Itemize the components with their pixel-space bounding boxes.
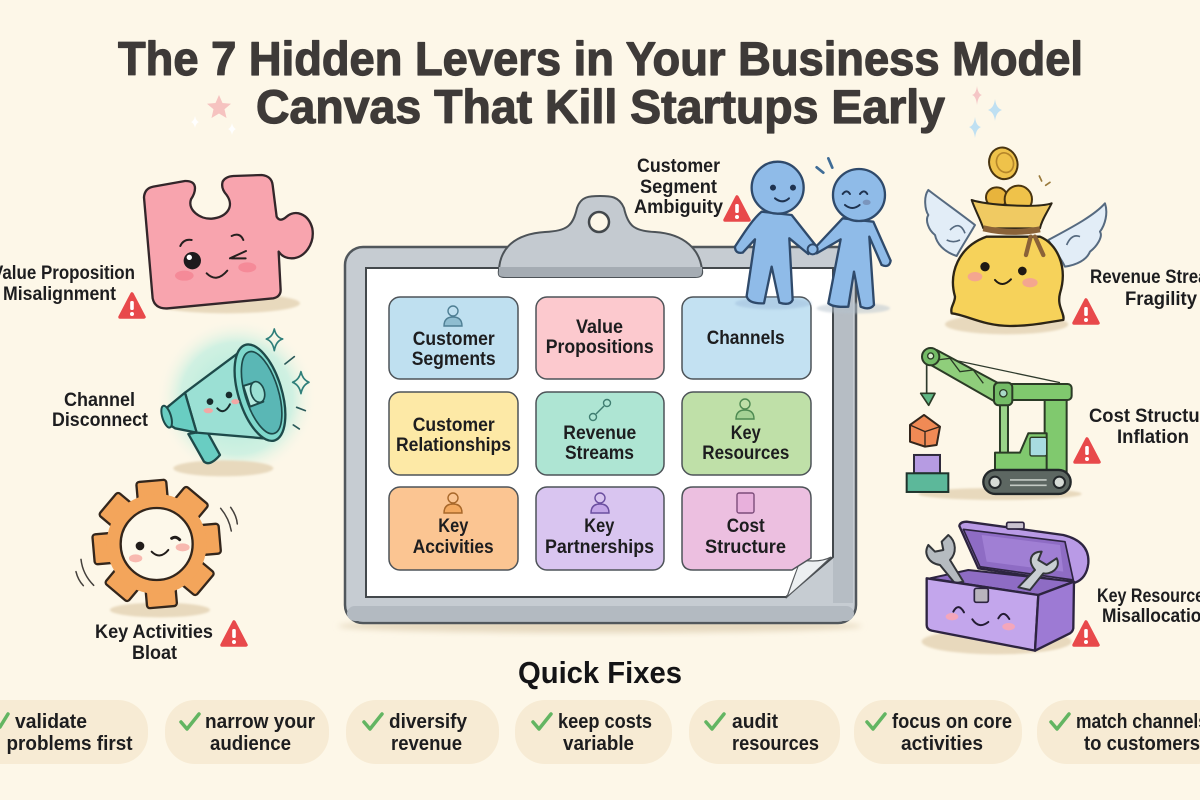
title: The 7 Hidden Levers in Your Business Model (118, 32, 1083, 85)
fix pill: focus on core activities (854, 700, 1022, 764)
label: Revenue Streams Fragility (1090, 267, 1200, 310)
canvas block: Key Resources: Resources (702, 443, 789, 464)
illustration: megaphone (157, 318, 317, 478)
canvas block: Customer Segments: Customer (413, 329, 495, 350)
label: Key Activities Bloat: Key Activities (95, 622, 213, 643)
fix pill: audit resources (689, 700, 840, 764)
canvas block: Value Propositions: Value (576, 317, 623, 338)
canvas block: Cost Structure: Structure (705, 537, 786, 558)
character: customer segment people (735, 158, 891, 314)
fix pill: diversify revenue: revenue (391, 733, 462, 755)
canvas block: Key Partnerships: Key (584, 516, 615, 537)
label: Customer Segment Ambiguity (634, 156, 723, 218)
canvas block: Value Propositions (536, 297, 664, 379)
title: Canvas That Kill Startups Early (256, 80, 945, 133)
fix pill: keep costs variable: keep costs (558, 711, 652, 733)
fix pill: keep costs variable (515, 700, 672, 764)
label: Customer Segment Ambiguity: Customer (637, 156, 721, 177)
label: Value Proposition Misalignment (0, 263, 135, 305)
canvas block: Key Partnerships: Partnerships (545, 537, 654, 558)
fix pill: match channels to customers (1037, 700, 1200, 764)
canvas block: Key Resources (682, 392, 811, 475)
illustration: money bag with wings (925, 144, 1106, 334)
label: Revenue Streams Fragility: Fragility (1125, 289, 1197, 310)
canvas block: Customer Relationships: Customer (413, 415, 495, 436)
fix pill: narrow your audience: narrow your (205, 711, 315, 733)
icon: warning customer segment (725, 197, 749, 220)
clipboard clip (499, 196, 702, 277)
canvas block: Key Activities (389, 487, 518, 570)
fix pill: diversify revenue: diversify (389, 711, 468, 733)
label: Key Resources Misallocation (1097, 586, 1200, 627)
fix pill: validate problems first (0, 700, 148, 764)
canvas block: Channels: Channels (707, 328, 785, 349)
canvas block: Customer Segments: Segments (412, 349, 496, 370)
icon: title sparkles (191, 86, 1002, 138)
page curl (787, 557, 831, 597)
canvas block: Revenue Streams (536, 392, 664, 475)
illustration: crane (907, 348, 1082, 500)
panel: clipboard (338, 196, 862, 633)
clipboard paper (366, 268, 833, 597)
canvas block: Key Resources: Key (731, 423, 761, 444)
fix pill: audit resources: audit (732, 711, 778, 733)
illustration: toolbox (922, 522, 1088, 654)
canvas block: Revenue Streams: Streams (565, 443, 634, 464)
label: Channel Disconnect (52, 390, 149, 431)
label: Channel Disconnect: Disconnect (52, 410, 149, 431)
canvas block: Customer Relationships: Relationships (396, 435, 511, 456)
fix pill: keep costs variable: variable (563, 733, 634, 755)
fix pill: validate problems first: validate (15, 711, 87, 733)
label: Key Activities Bloat: Bloat (132, 643, 178, 664)
canvas block: Revenue Streams: Revenue (563, 423, 636, 444)
canvas block: Customer Relationships (389, 392, 518, 475)
canvas block: Cost Structure (682, 487, 811, 570)
label: Cost Structure Inflation: Inflation (1117, 427, 1189, 448)
label: Customer Segment Ambiguity: Ambiguity (634, 197, 723, 218)
fix pill: focus on core activities: focus on core (892, 711, 1012, 733)
canvas block: Channels (682, 297, 811, 379)
fix pill: validate problems first: problems first (6, 733, 133, 755)
canvas block: Key Activities: Key (438, 516, 469, 537)
fix pill: focus on core activities: activities (901, 733, 983, 755)
heading: Quick Fixes: Quick Fixes (518, 655, 682, 690)
label: Value Proposition Misalignment: Misalignment (3, 284, 117, 305)
icon: warning key resources (1074, 622, 1098, 645)
label: Cost Structure Inflation (1089, 406, 1200, 448)
icon: warning cost (1075, 439, 1099, 462)
canvas block: Cost Structure: Cost (727, 516, 765, 537)
canvas block: Customer Segments (389, 297, 518, 379)
fix pill: diversify revenue (346, 700, 499, 764)
illustration: gear (76, 475, 237, 617)
fix pill: audit resources: resources (732, 733, 819, 755)
icon: warning revenue (1074, 300, 1098, 323)
canvas block: Key Partnerships (536, 487, 664, 570)
label: Customer Segment Ambiguity: Segment (640, 177, 718, 198)
fix pill: narrow your audience (165, 700, 329, 764)
canvas block: Key Activities: Accivities (413, 537, 494, 558)
fix pill: narrow your audience: audience (210, 733, 291, 755)
canvas block: Value Propositions: Propositions (546, 337, 654, 358)
illustration: puzzle piece (144, 175, 313, 313)
label: Key Activities Bloat (95, 622, 213, 664)
icon: warning key activities (222, 622, 246, 645)
label: Channel Disconnect: Channel (64, 390, 135, 411)
title (118, 32, 1083, 133)
icon: warning value proposition (120, 294, 144, 317)
